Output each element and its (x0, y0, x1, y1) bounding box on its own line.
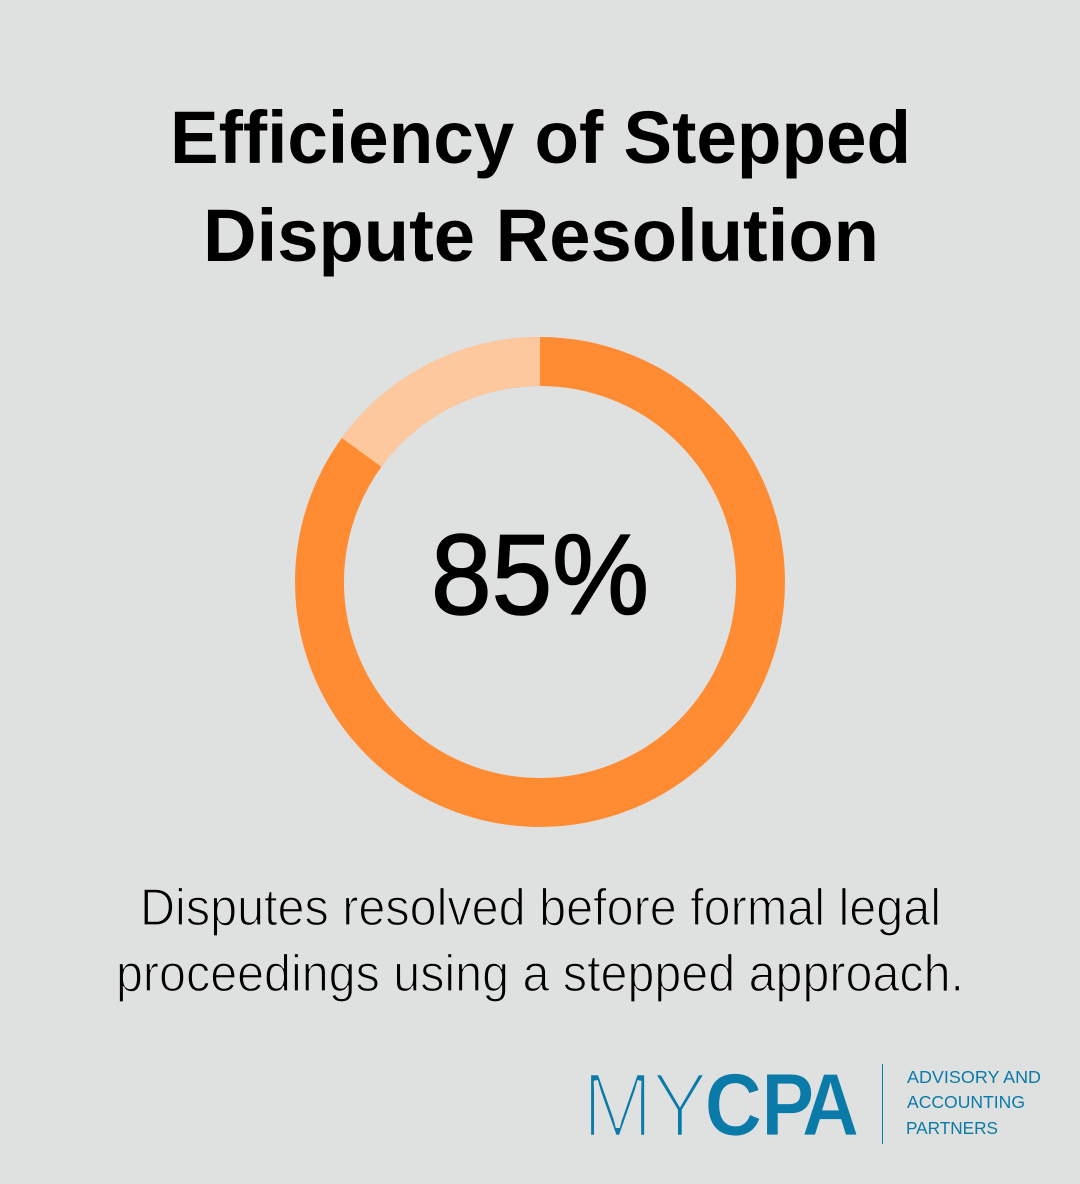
logo tagline: PARTNERS (906, 1118, 998, 1138)
description text (116, 879, 964, 1003)
description text: proceedings using a stepped approach. (116, 945, 964, 1003)
logo: MYCPA: MY (582, 1053, 708, 1157)
description text: Disputes resolved before formal legal (140, 879, 941, 937)
logo tagline: ACCOUNTING (907, 1092, 1025, 1112)
title (170, 96, 911, 277)
value: 85%: 85% (431, 512, 649, 639)
title: Efficiency of Stepped (170, 96, 911, 179)
logo: MYCPA (582, 1053, 1041, 1157)
logo: MYCPA: CPA (705, 1055, 859, 1154)
logo tagline (906, 1067, 1041, 1138)
title: Dispute Resolution (203, 194, 879, 277)
logo tagline: ADVISORY AND (907, 1067, 1041, 1087)
donut chart: 85% (320, 362, 760, 802)
